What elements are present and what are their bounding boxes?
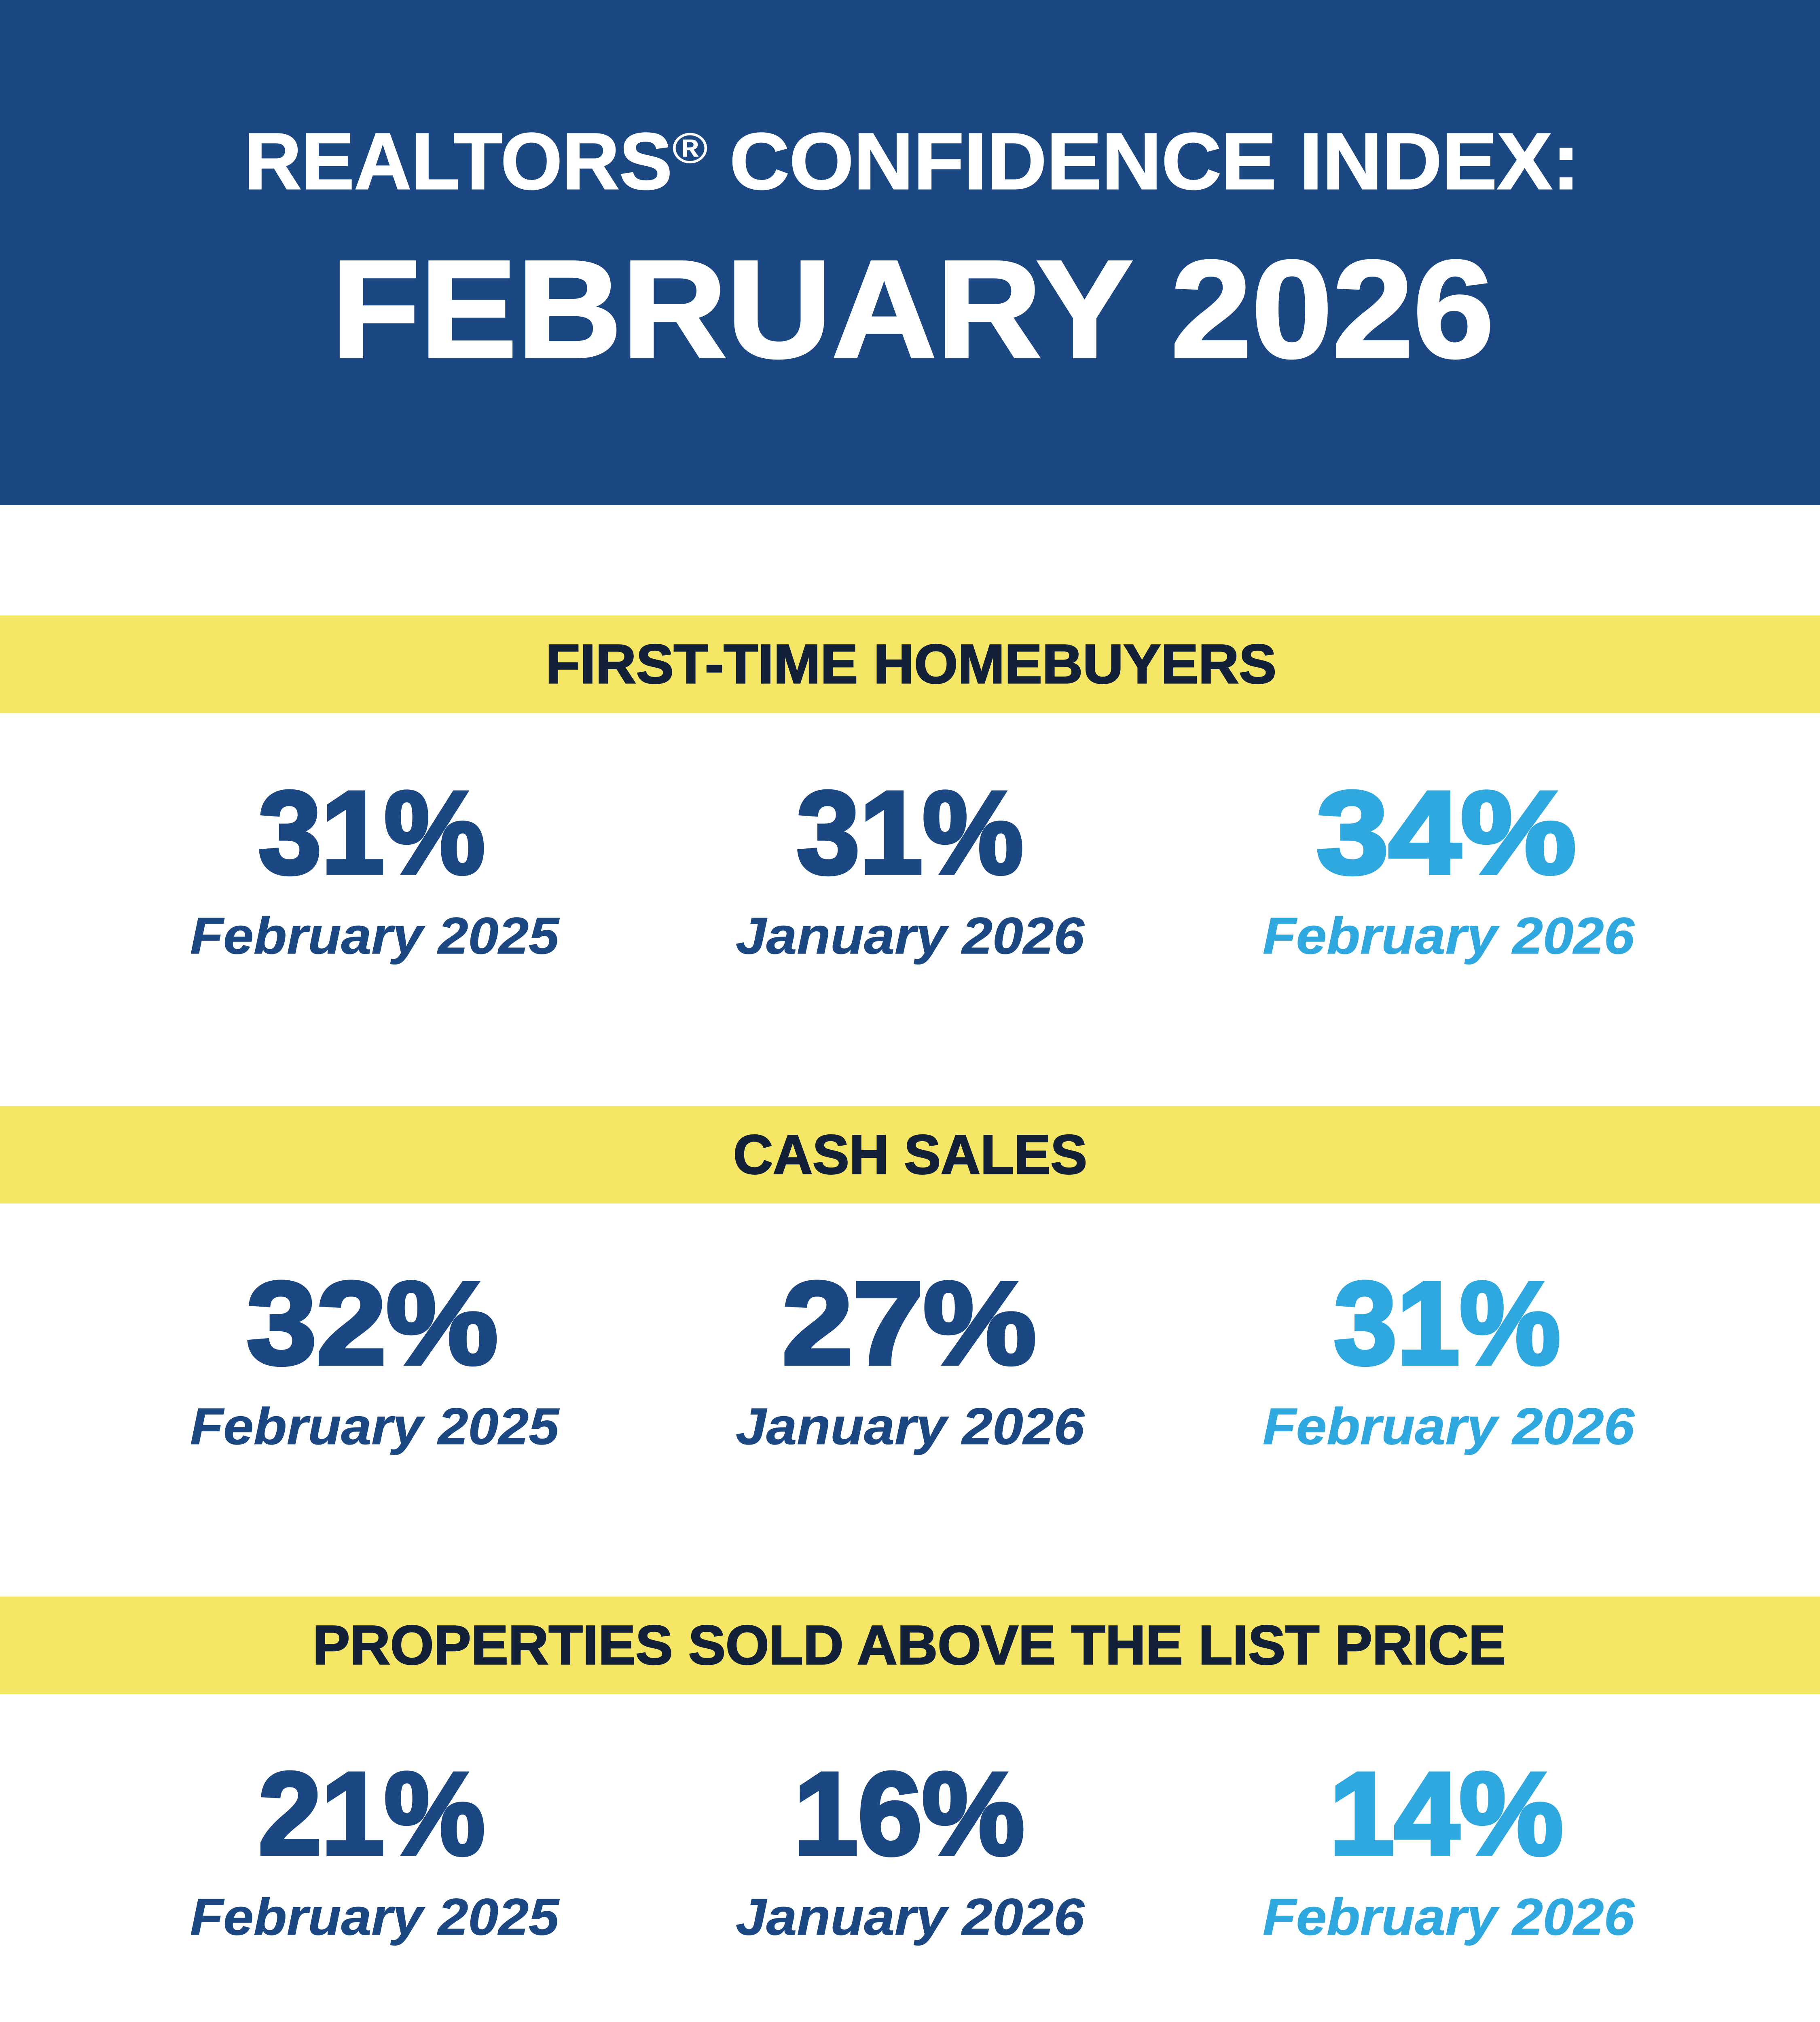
section band xyxy=(0,615,1820,713)
panel: cash sales xyxy=(0,1106,1820,1478)
panel: first-time homebuyers xyxy=(0,615,1820,988)
stat: February 2026: February 2026 xyxy=(1263,907,1635,965)
stat: February 2026 xyxy=(1263,767,1635,965)
stat: February 2025: February 2025 xyxy=(190,1398,560,1455)
title line 1 xyxy=(244,116,1580,206)
stat: January 2026 xyxy=(736,1748,1085,1946)
stat: February 2026 xyxy=(1263,1748,1635,1946)
stat: January 2026: January 2026 xyxy=(736,907,1085,965)
stat: February 2026: 31% xyxy=(1334,1258,1560,1389)
section heading: CASH SALES xyxy=(733,1124,1087,1186)
title line 1: ® xyxy=(672,124,708,172)
section band xyxy=(0,1106,1820,1203)
stat: January 2026: January 2026 xyxy=(736,1398,1085,1455)
stat: February 2026: February 2026 xyxy=(1263,1888,1635,1946)
stat: February 2025 xyxy=(190,767,560,965)
title line 1: REALTORS xyxy=(244,116,672,206)
stat: February 2025: February 2025 xyxy=(190,907,560,965)
stat: January 2026: 16% xyxy=(794,1748,1024,1879)
stat: January 2026: 31% xyxy=(797,767,1023,898)
stat: February 2026: 34% xyxy=(1316,767,1576,898)
stat: February 2025 xyxy=(190,1258,560,1455)
stat: February 2025: 21% xyxy=(258,1748,485,1879)
panel: properties sold above the list price xyxy=(0,1597,1820,1969)
stat: January 2026 xyxy=(736,767,1085,965)
title line 1: CONFIDENCE INDEX: xyxy=(730,116,1580,206)
stat: January 2026 xyxy=(736,1258,1085,1455)
stat: January 2026: 27% xyxy=(782,1258,1036,1389)
title line 2: FEBRUARY 2026 xyxy=(331,231,1494,387)
stat: February 2026: February 2026 xyxy=(1263,1398,1635,1455)
header banner xyxy=(0,0,1820,505)
stat: January 2026: January 2026 xyxy=(736,1888,1085,1946)
section heading: FIRST-TIME HOMEBUYERS xyxy=(546,633,1276,695)
stat: February 2026 xyxy=(1263,1258,1635,1455)
stat: February 2025: 32% xyxy=(247,1258,498,1389)
section band xyxy=(0,1597,1820,1694)
section heading: PROPERTIES SOLD ABOVE THE LIST PRICE xyxy=(313,1614,1506,1676)
stat: February 2025 xyxy=(190,1748,560,1946)
stat: February 2026: 14% xyxy=(1329,1748,1563,1879)
stat: February 2025: 31% xyxy=(258,767,485,898)
stat: February 2025: February 2025 xyxy=(190,1888,560,1946)
